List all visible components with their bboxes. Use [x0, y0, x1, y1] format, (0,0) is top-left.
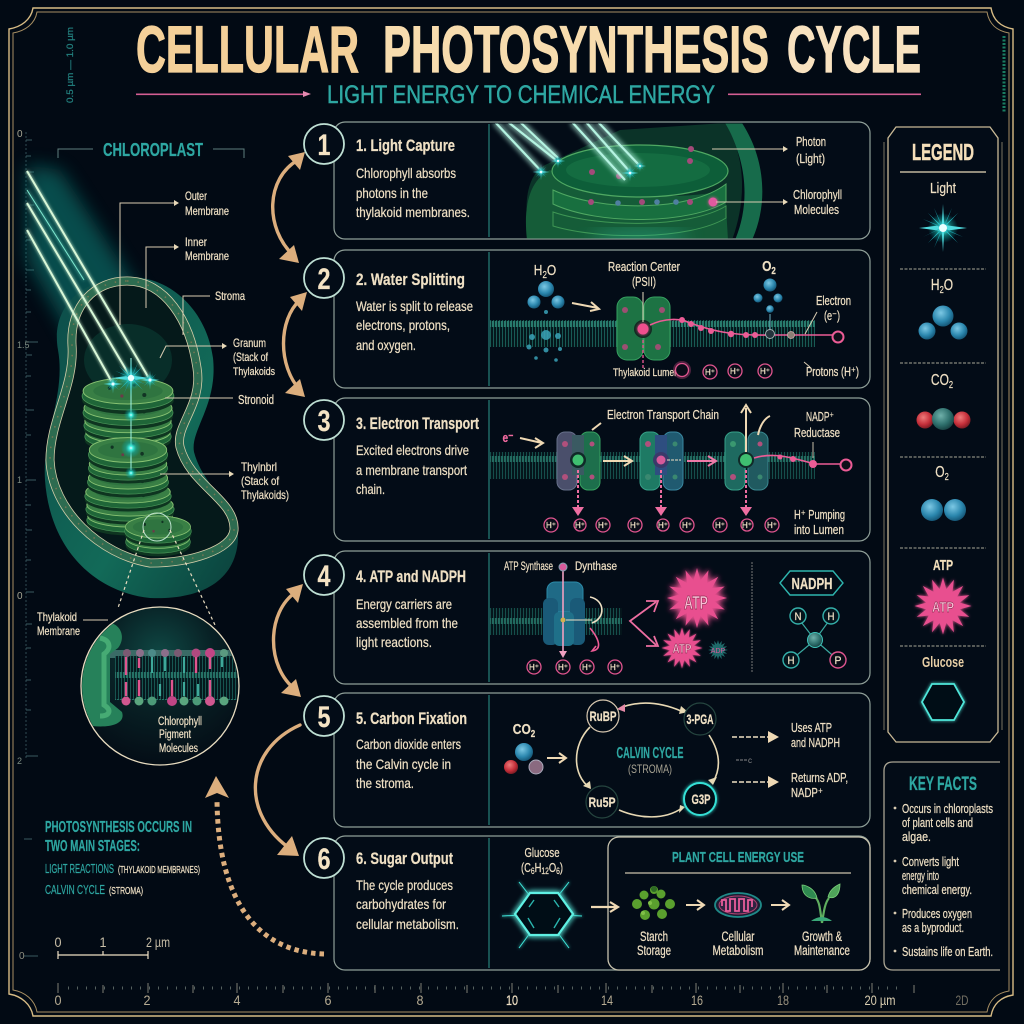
step 5 text	[356, 710, 467, 791]
legend: light: Light	[930, 180, 957, 197]
bottom ruler: 4	[234, 992, 241, 1008]
Calvin cycle label: CALVIN CYCLE	[616, 745, 684, 762]
O2 molecule: O	[762, 258, 771, 274]
NADPH molecule: H	[828, 611, 835, 623]
number 6 badge: 6	[318, 843, 330, 876]
uses label: Uses ATP	[791, 721, 832, 735]
chlorophyll label: Molecules	[794, 203, 839, 217]
icon: mitochondrion	[715, 893, 761, 917]
proton row: H⁺	[575, 521, 585, 530]
chlorophyll pigment label: Chlorophyll	[158, 716, 202, 728]
left ruler: 0	[17, 129, 23, 140]
G3P node	[684, 783, 716, 815]
NADP reductase label	[794, 410, 840, 440]
stages note: LIGHT REACTIONS	[45, 861, 114, 876]
branch arrows	[630, 601, 658, 646]
membrane band	[490, 452, 815, 479]
NADPH molecule: N	[794, 611, 802, 623]
Ru5P node: Ru5P	[588, 794, 616, 810]
subtitle	[136, 81, 921, 109]
proton row: H⁺	[715, 521, 725, 530]
bottom ruler: 6	[324, 992, 332, 1008]
arrow	[547, 753, 566, 763]
pumping label	[794, 508, 845, 537]
pumping arrows	[572, 470, 752, 516]
step 1 text: Chlorophyll absorbs	[356, 165, 456, 181]
H2O label and molecule: O	[547, 262, 556, 278]
NADP reductase label: NADP⁺	[806, 410, 834, 424]
proton row: H⁺	[610, 663, 620, 672]
step 2 text: and oxygen.	[356, 337, 416, 353]
number 1 badge: 1	[318, 129, 330, 162]
step 6 text: The cycle produces	[356, 877, 453, 893]
protein complex 3	[725, 405, 770, 490]
decorative vertical scale text: 0.5 µm — 1.0 µm	[65, 27, 75, 103]
proton row: H⁺	[658, 521, 668, 530]
Ru5P node	[586, 786, 618, 818]
scale bar	[54, 934, 170, 959]
step 3 text	[356, 415, 479, 497]
proton row: H⁺	[767, 521, 777, 530]
stages note: PHOTOSYNTHESIS OCCURS IN	[45, 819, 192, 836]
NADPH hex label	[780, 571, 843, 595]
legend: carbon dioxide: CO	[931, 370, 949, 388]
chloroplast labels: Membrane	[185, 204, 229, 218]
number 4 badge	[304, 555, 344, 595]
legend: ATP	[914, 557, 972, 634]
chloroplast labels: Inner	[185, 235, 207, 249]
chloroplast labels: Stroma	[215, 289, 245, 303]
CO2 molecule: CO	[513, 721, 531, 737]
panel: step 6 sugar output	[334, 836, 870, 970]
NADP reductase label: Reductase	[794, 426, 840, 440]
proton row: H⁺	[598, 521, 608, 530]
arrow to plant cell panel	[591, 902, 618, 912]
metabolism label	[712, 929, 764, 958]
protein complex 1	[557, 423, 601, 490]
icon: sprout	[802, 884, 840, 923]
arrow	[572, 302, 599, 311]
electron chain	[650, 317, 844, 342]
chloroplast labels: Thylakoids)	[241, 488, 289, 502]
legend: ATP: ATP	[933, 557, 953, 574]
H2O label and molecule	[526, 262, 564, 362]
proton row: H⁺	[582, 663, 592, 672]
step 3 text: 3. Electron Transport	[356, 415, 479, 433]
glucose label: 6	[556, 866, 560, 876]
returns label	[791, 771, 848, 800]
step 3 text: Excited electrons drive	[356, 442, 469, 458]
proton row	[544, 518, 779, 532]
arrow	[687, 456, 716, 466]
chloroplast illustration	[27, 165, 238, 598]
arrow	[771, 900, 789, 910]
divider	[751, 562, 753, 672]
thylakoid membrane label	[37, 610, 108, 638]
fact 2: Converts light	[902, 855, 959, 869]
membrane band	[490, 608, 622, 635]
returns label: NADP⁺	[791, 786, 823, 800]
electron label: Electron	[816, 294, 851, 308]
legend: water: H	[931, 275, 940, 293]
proton row	[613, 361, 859, 379]
panel: legend: LEGEND	[912, 139, 974, 165]
reaction center label	[608, 260, 680, 289]
glucose label: 12	[541, 866, 549, 876]
ATP synthase	[504, 561, 617, 658]
RuBP node	[587, 700, 619, 732]
scale bar: 0	[54, 934, 62, 950]
step 1 text	[356, 137, 470, 220]
left ruler: 0	[17, 591, 23, 602]
fact 4	[894, 945, 993, 959]
metabolism label: Metabolism	[712, 943, 764, 958]
chloroplast labels: Membrane	[185, 249, 229, 263]
reaction center label: (PSII)	[632, 275, 656, 289]
fact 3: Produces oxygen	[902, 907, 972, 921]
legend: glucose: Glucose	[922, 654, 964, 671]
3-PGA node: 3-PGA	[686, 711, 714, 727]
bottom ruler: 2D	[956, 992, 968, 1008]
NADPH molecule: P	[834, 655, 842, 667]
step 6 text	[356, 850, 459, 932]
chloroplast labels: Outer	[185, 189, 207, 203]
step 5 text: Carbon dioxide enters	[356, 736, 461, 752]
panel: step 5 carbon fixation	[334, 693, 870, 827]
electron chain	[754, 442, 852, 470]
proton row: H⁺	[546, 521, 556, 530]
glucose label: 6	[531, 866, 535, 876]
scale bar: 2 µm	[146, 934, 170, 950]
title: CYCLE	[787, 12, 921, 86]
fact 2: chemical energy.	[902, 883, 972, 897]
small ATP burst: ADP	[711, 648, 726, 655]
RuBP node: RuBP	[590, 708, 616, 724]
legend: carbon dioxide: 2	[949, 379, 953, 390]
step 4 text	[356, 568, 466, 650]
3-PGA node	[684, 703, 716, 735]
Calvin cycle arcs	[576, 703, 719, 817]
step 1 text: 1. Light Capture	[356, 137, 455, 155]
chloroplast labels: Granum	[233, 336, 266, 350]
step 2 text: 2. Water Splitting	[356, 271, 465, 289]
photon label: (Light)	[796, 152, 825, 166]
electron in	[502, 430, 543, 448]
step 1 chloroplast scene	[495, 122, 762, 244]
legend: water: O	[944, 275, 953, 293]
panel: step 2 water splitting	[334, 250, 870, 388]
chloroplast labels: (Stack of	[241, 474, 280, 488]
fact 3	[894, 907, 972, 935]
proton row: H⁺	[730, 367, 740, 376]
step 2 text: electrons, protons,	[356, 317, 450, 333]
panel: plant cell energy use: PLANT CELL ENERGY USE	[672, 850, 804, 866]
fact 1: Occurs in chloroplasts	[902, 802, 993, 816]
bottom ruler: 16	[691, 992, 703, 1008]
number 1 badge	[304, 124, 344, 164]
magnifier: thylakoid membrane detail	[78, 513, 240, 765]
glucose label: O	[549, 862, 556, 875]
flow arrow: step 1 to 2	[273, 152, 305, 263]
membrane band	[490, 320, 815, 347]
H2O label and molecule: H	[534, 262, 542, 278]
panel: step 1 light capture	[334, 122, 870, 244]
step 1 text: thylakoid membranes.	[356, 204, 470, 220]
step 3 text: chain.	[356, 481, 385, 497]
CO2 molecule	[504, 721, 543, 774]
legend: light	[919, 180, 967, 252]
starch label: Starch	[640, 929, 668, 944]
bottom ruler	[54, 983, 968, 1008]
number 3 badge: 3	[318, 405, 330, 438]
proton row: Thylakoid Lumen	[613, 367, 679, 379]
Calvin cycle label	[616, 745, 684, 776]
step 2 text: Water is split to release	[356, 298, 473, 314]
number 2 badge	[304, 258, 344, 298]
panel: plant cell energy use	[608, 837, 870, 970]
dashed arrows: c	[748, 756, 752, 765]
bottom ruler: 0	[54, 992, 62, 1008]
panel: step 3 electron transport	[334, 398, 870, 541]
glucose hexagon	[502, 882, 582, 948]
electron label: (e⁻)	[824, 309, 840, 323]
step 2 text	[356, 271, 473, 353]
stages note: (THYLAKOID MEMBRANES)	[118, 865, 200, 876]
dashed arrows	[732, 731, 779, 788]
bottom ruler: 2	[144, 992, 151, 1008]
proton row: H⁺	[705, 368, 715, 377]
stages note	[45, 819, 200, 897]
step 4 text: Energy carriers are	[356, 596, 452, 612]
proton row: H⁺	[742, 521, 752, 530]
bottom ruler: 14	[601, 992, 613, 1008]
number 6 badge	[304, 838, 344, 878]
uses label	[791, 721, 840, 750]
panel: step 4 ATP and NADPH	[334, 551, 870, 684]
step 6 text: cellular metabolism.	[356, 916, 459, 932]
left ruler: 0	[19, 951, 25, 962]
legend: carbon dioxide	[916, 370, 970, 430]
step 6 text: 6. Sugar Output	[356, 850, 453, 868]
proton row: H⁺	[529, 663, 539, 672]
thylakoid membrane label: Membrane	[37, 624, 80, 638]
pumping label: into Lumen	[794, 523, 844, 537]
arrow	[686, 900, 704, 910]
left ruler: 1.5	[17, 340, 30, 350]
fact 1	[894, 802, 993, 844]
glucose label: Glucose	[524, 846, 560, 860]
step 5 text: 5. Carbon Fixation	[356, 710, 467, 728]
growth label	[794, 929, 850, 958]
chloroplast labels: Thylnbrl	[241, 460, 277, 474]
title	[136, 12, 921, 86]
subtitle: LIGHT ENERGY TO CHEMICAL ENERGY	[327, 81, 715, 109]
chlorophyll pigment label: Pigment	[159, 729, 192, 741]
step 3 text: a membrane transport	[356, 462, 467, 478]
proton row: H⁺	[630, 521, 640, 530]
fact 1: of plant cells and	[902, 816, 973, 830]
proton row: H⁺	[558, 663, 568, 672]
number 5 badge: 5	[318, 701, 330, 734]
reaction center label: Reaction Center	[608, 260, 680, 274]
chloroplast labels: Thylakoids	[233, 366, 275, 378]
step 4 text: light reactions.	[356, 634, 432, 650]
starch label	[637, 929, 671, 958]
proton row: H⁺	[760, 367, 770, 376]
step 5 text: the stroma.	[356, 775, 414, 791]
step 5 text: the Calvin cycle in	[356, 756, 451, 772]
legend: oxygen	[921, 462, 966, 521]
legend: oxygen: 2	[945, 471, 949, 482]
bottom ruler: 10	[506, 992, 518, 1008]
ATP synthase: ATP Synthase	[504, 561, 553, 573]
number 5 badge	[304, 696, 344, 736]
chlorophyll label	[716, 188, 842, 217]
panel: legend	[884, 127, 1002, 742]
chloroplast labels: Stronoid	[238, 392, 274, 407]
photon label: Photon	[796, 135, 826, 149]
photon label	[712, 135, 826, 166]
panel: key facts: KEY FACTS	[909, 773, 977, 795]
bottom ruler: 8	[416, 992, 424, 1008]
CO2 molecule: 2	[531, 728, 535, 739]
step 4 text: 4. ATP and NADPH	[356, 568, 466, 586]
metabolism label: Cellular	[722, 929, 755, 944]
ATP synthase: Dynthase	[575, 561, 617, 573]
NADPH molecule	[783, 608, 846, 668]
step 6 text: carbohydrates for	[356, 896, 446, 912]
step 1 text: photons in the	[356, 185, 428, 201]
starch label: Storage	[637, 943, 671, 958]
stages note: CALVIN CYCLE	[45, 882, 105, 897]
chlorophyll pigment label	[158, 716, 202, 755]
chloroplast heading: CHLOROPLAST	[103, 139, 203, 160]
number 2 badge: 2	[318, 263, 330, 296]
reaction center protein	[617, 292, 670, 368]
small ATP burst: ATP	[672, 641, 692, 656]
NADPH hex label: NADPH	[792, 576, 832, 593]
thylakoid membrane label: Thylakoid	[37, 610, 77, 624]
proton row: H⁺	[682, 521, 692, 530]
flow arrow: step 5 to 6	[255, 725, 300, 856]
decorative right green scale	[1002, 36, 1006, 112]
proton row: Protons (H⁺)	[806, 365, 859, 379]
fact 4: Sustains life on Earth.	[902, 945, 993, 959]
stages note: TWO MAIN STAGES:	[45, 838, 140, 855]
arrow	[603, 456, 632, 466]
scale bar: 1	[100, 934, 107, 950]
electron in: e⁻	[502, 430, 514, 445]
glucose label	[521, 846, 563, 876]
chain title: Electron Transport Chain	[607, 407, 719, 422]
O2 molecule	[754, 258, 782, 329]
fact 1: algae.	[902, 830, 931, 844]
large ATP burst	[667, 568, 727, 628]
panel: key facts	[884, 762, 1000, 970]
electron label	[805, 294, 851, 334]
Calvin cycle label: (STROMA)	[628, 762, 672, 776]
legend: water: 2	[940, 284, 944, 295]
pumping label: H⁺ Pumping	[794, 508, 845, 522]
glucose label: H	[535, 862, 541, 875]
legend: oxygen: O	[935, 462, 945, 480]
NADPH molecule: H	[788, 655, 795, 667]
O2 molecule: 2	[771, 265, 776, 276]
small ATP burst	[662, 628, 728, 668]
left ruler	[17, 129, 38, 962]
returns label: Returns ADP,	[791, 771, 848, 785]
growth label: Growth &	[802, 929, 842, 944]
icon: starch granules	[632, 886, 675, 920]
glucose label: )	[560, 862, 563, 875]
step 4 text: assembled from the	[356, 615, 458, 631]
legend: water	[918, 275, 968, 340]
fact 3: as a byproduct.	[902, 921, 964, 935]
protein complex 2	[640, 432, 683, 490]
chlorophyll label: Chlorophyll	[793, 188, 842, 202]
chloroplast labels	[120, 189, 289, 502]
flow arrow: step 2 to 3	[284, 292, 307, 397]
left ruler: 1	[17, 475, 22, 485]
legend: glucose	[922, 654, 964, 720]
bottom ruler: 18	[777, 992, 789, 1008]
proton row	[527, 660, 622, 674]
G3P node: G3P	[692, 791, 710, 807]
left ruler: 2	[17, 756, 22, 766]
title: PHOTOSYNTHESIS	[383, 12, 769, 86]
number 3 badge	[304, 400, 344, 440]
uses label: and NADPH	[791, 736, 840, 750]
large ATP burst: ATP	[684, 593, 708, 613]
glucose label: (C	[521, 862, 531, 875]
number 4 badge: 4	[318, 560, 331, 593]
dotted return arrow	[205, 776, 324, 954]
chloroplast labels: (Stack of	[233, 350, 268, 364]
fact 2: energy into	[902, 869, 939, 883]
growth label: Maintenance	[794, 943, 850, 958]
fact 2	[894, 855, 972, 897]
bottom ruler: 20 µm	[864, 992, 896, 1008]
title: CELLULAR	[136, 12, 359, 86]
stages note: (STROMA)	[109, 886, 143, 897]
legend: ATP: ATP	[932, 599, 954, 616]
H2O label and molecule: 2	[542, 269, 547, 280]
chlorophyll pigment label: Molecules	[159, 743, 198, 755]
flow arrow: step 4 to 5	[274, 584, 303, 697]
